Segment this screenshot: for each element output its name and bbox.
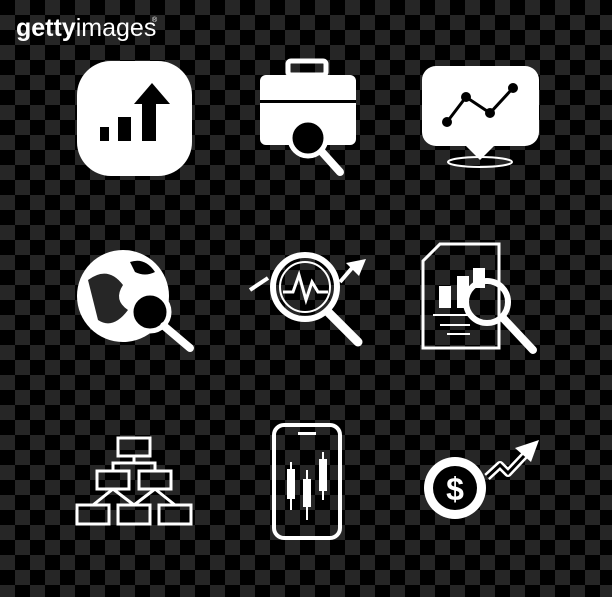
icon: hierarchy <box>77 438 191 524</box>
icon: briefcase search <box>260 61 356 172</box>
logo: gettyimages: ® <box>152 16 158 24</box>
logo: gettyimages: gettyimages <box>16 14 156 42</box>
icon: document analysis <box>423 244 533 350</box>
icon: dollar growth <box>424 440 539 519</box>
icon: magnifier with wave and arrow <box>250 255 366 342</box>
icon: speech bubble line chart <box>422 66 539 167</box>
icon: dollar growth: $ <box>446 471 464 507</box>
icon: smartphone candlestick <box>274 425 340 538</box>
icon: globe search <box>77 250 190 348</box>
icon: growth chart square <box>77 61 192 176</box>
